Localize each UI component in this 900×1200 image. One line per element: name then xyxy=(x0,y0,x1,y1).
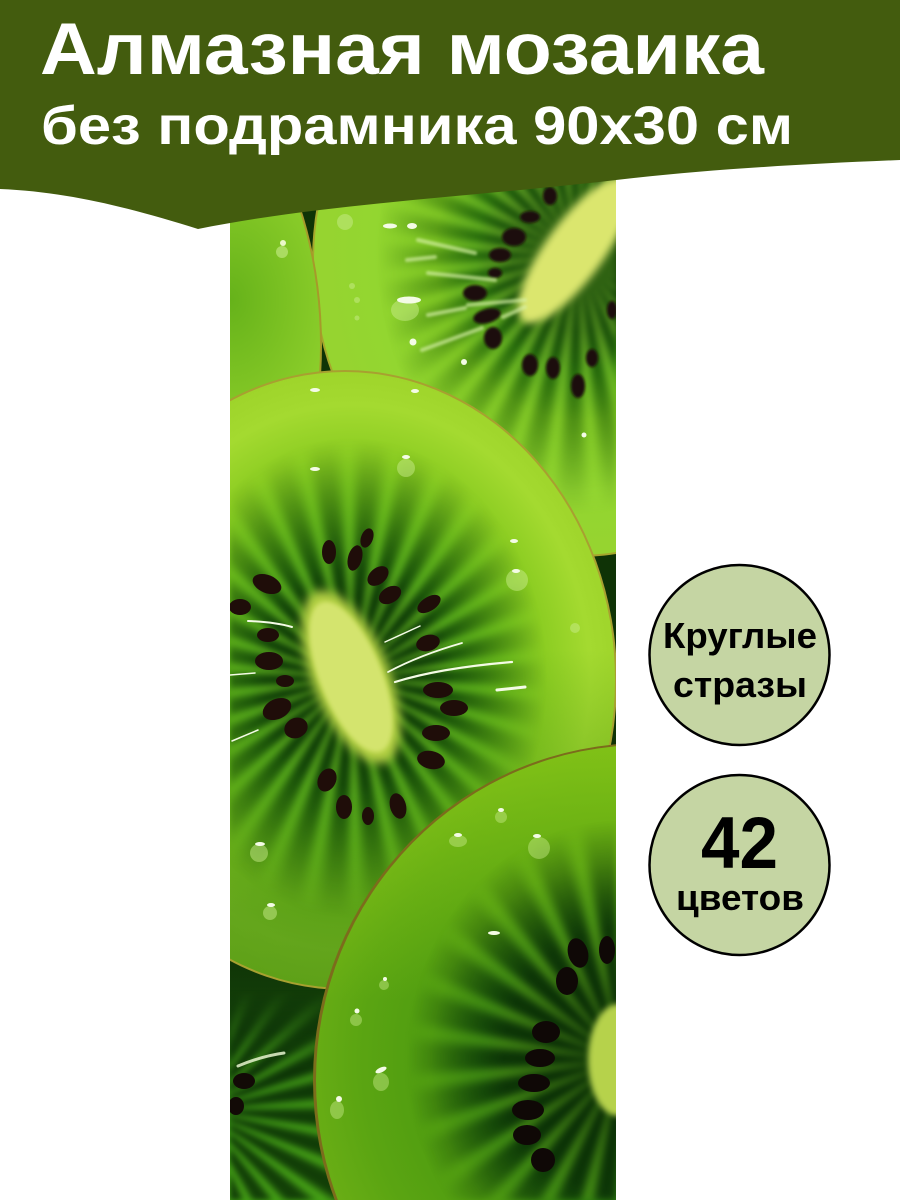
seeds and highlight xyxy=(230,1052,286,1115)
title: Алмазная мозаика xyxy=(40,9,766,90)
kiwi slice: top right xyxy=(312,180,616,556)
flesh xyxy=(314,180,616,554)
core, seeds and drops xyxy=(330,808,616,1172)
core, seeds, streaks and drops xyxy=(230,388,580,920)
flesh xyxy=(230,212,320,399)
badge: 42 colours: цветов xyxy=(676,877,804,918)
badge: round rhinestones: Круглые xyxy=(663,615,817,656)
subtitle: без подрамника 90х30 см xyxy=(41,96,793,156)
flesh xyxy=(316,746,616,1200)
rays xyxy=(230,1003,335,1200)
badge: round rhinestones: стразы xyxy=(673,664,807,705)
kiwi slice: bottom left xyxy=(230,170,616,1200)
rays xyxy=(230,448,540,904)
core, seeds, streaks and drops xyxy=(337,180,616,438)
kiwi slice: bottom right xyxy=(313,744,616,1200)
flesh xyxy=(230,372,615,988)
badge: round rhinestones xyxy=(650,565,830,745)
rays xyxy=(415,828,616,1200)
kiwi slice: main centre xyxy=(230,370,616,990)
panel: kiwi photo xyxy=(230,170,616,1200)
kiwi slice: top left xyxy=(230,212,322,400)
header banner xyxy=(0,0,900,229)
drop xyxy=(276,240,288,258)
badge: 42 colours xyxy=(650,775,830,955)
badge: 42 colours: 42 xyxy=(701,803,778,884)
rays xyxy=(388,181,616,502)
